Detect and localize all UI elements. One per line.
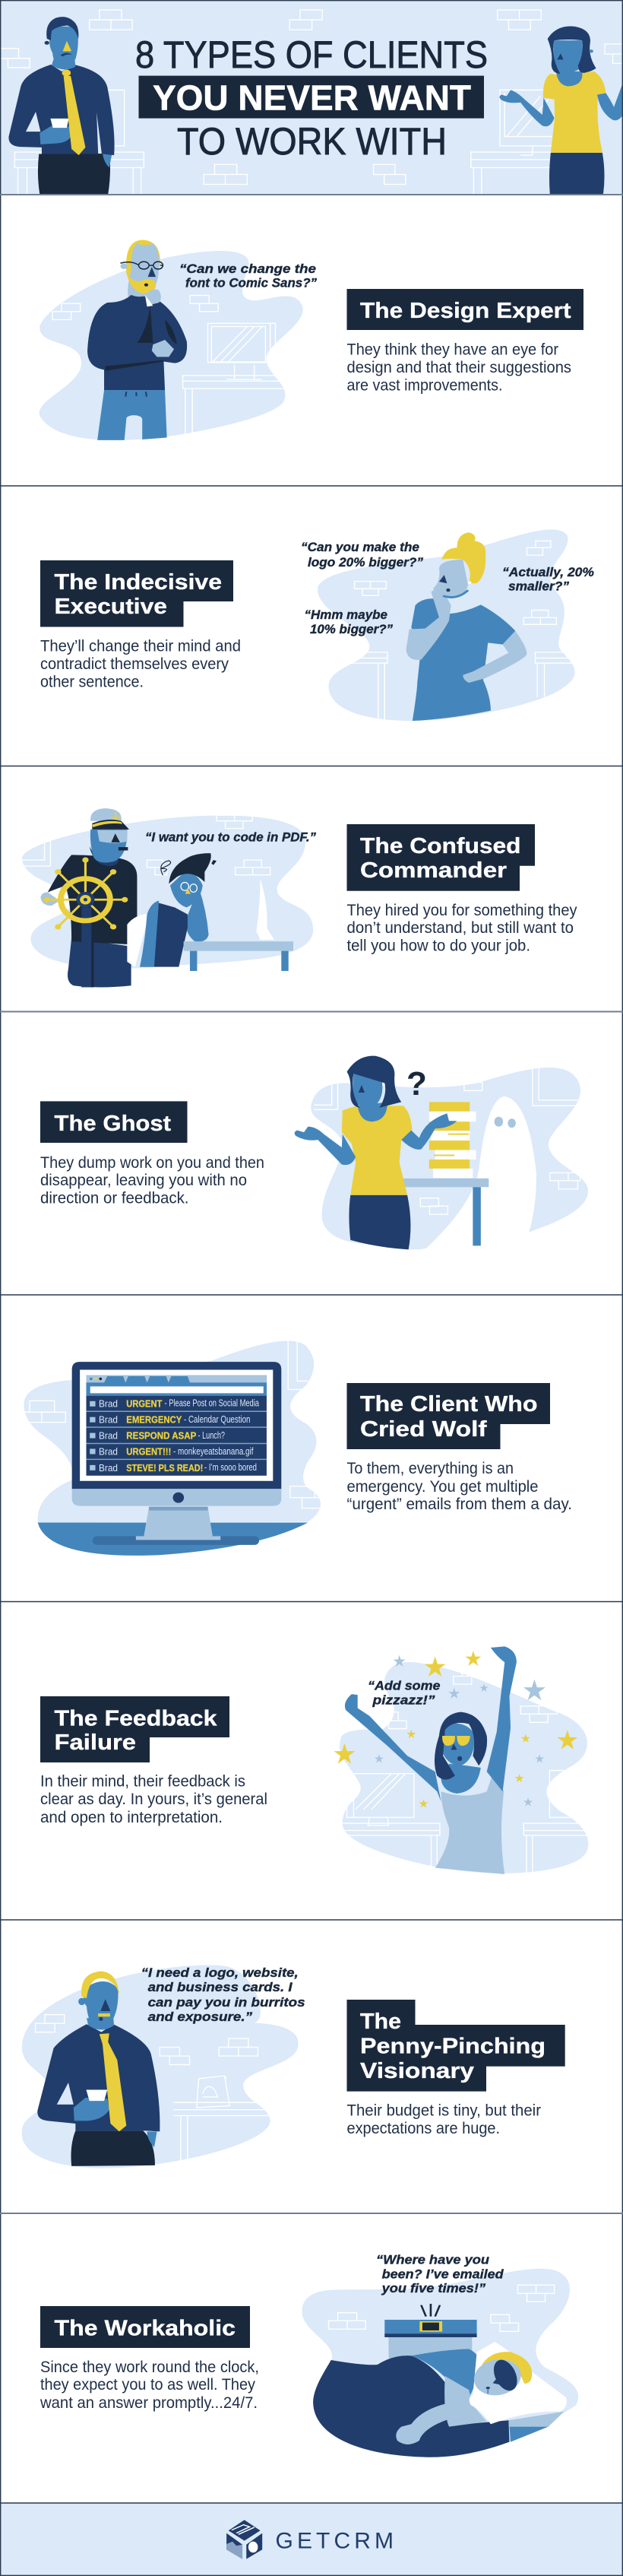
panel: the ghost	[40, 1056, 588, 1253]
header illustration	[0, 10, 623, 195]
description	[40, 637, 241, 690]
description: clear as day. In yours, it’s general	[40, 1791, 267, 1808]
quote: “Add some	[368, 1678, 441, 1692]
email list: STEVE! PLS READ!	[126, 1463, 203, 1474]
description	[346, 341, 571, 394]
description: are vast improvements.	[346, 377, 503, 394]
quotes: “Can you make the	[301, 540, 419, 554]
panel: the indecisive executive	[40, 529, 594, 721]
quote	[368, 1678, 441, 1708]
quotes: “Hmm maybe	[304, 608, 387, 622]
description: don’t understand, but still want to	[346, 919, 574, 937]
description: They hired you for something they	[346, 902, 577, 919]
email list: RESPOND ASAP	[126, 1431, 196, 1442]
description	[40, 2359, 259, 2412]
description: expectations are huge.	[346, 2120, 500, 2137]
quotes: smaller?”	[508, 579, 569, 594]
heading: The Design Expert	[360, 299, 571, 323]
heading: The Indecisive	[55, 570, 222, 595]
email list: Brad	[99, 1463, 118, 1474]
illustration: workaholic	[302, 2269, 578, 2457]
heading: Failure	[55, 1731, 136, 1755]
heading: Penny-Pinching	[360, 2034, 546, 2058]
quote: and exposure.”	[148, 2010, 253, 2024]
quote: pizzazz!”	[372, 1693, 435, 1708]
panel: the penny-pinching visionary	[22, 1965, 565, 2168]
panel: footer	[0, 2503, 623, 2576]
description: They’ll change their mind and	[40, 637, 241, 655]
description: contradict themselves every	[40, 655, 229, 673]
description	[40, 1773, 267, 1826]
heading	[40, 560, 233, 627]
quote: “Where have you	[376, 2253, 490, 2267]
quote: been? I’ve emailed	[382, 2267, 504, 2282]
quote: can pay you in burritos	[148, 1995, 305, 2010]
description: disappear, leaving you with no	[40, 1172, 247, 1189]
panel: the confused commander	[22, 808, 577, 987]
illustration: ghost	[295, 1056, 588, 1253]
quote	[179, 262, 317, 290]
heading: Cried Wolf	[360, 1417, 487, 1442]
email list: - monkeyeatsbanana.gif	[173, 1446, 254, 1457]
description: “urgent” emails from them a day.	[346, 1496, 572, 1513]
description: tell you how to do your job.	[346, 937, 530, 955]
quote: “Can we change the	[179, 262, 316, 276]
question mark: ?	[406, 1065, 427, 1102]
heading: The Feedback	[55, 1706, 217, 1731]
quotes	[301, 540, 594, 636]
heading: The Confused	[360, 834, 521, 858]
description	[346, 1460, 572, 1513]
quote	[141, 1965, 305, 2024]
heading	[346, 824, 535, 891]
description: Since they work round the clock,	[40, 2359, 259, 2376]
email list: Brad	[99, 1447, 118, 1458]
heading: Visionary	[360, 2059, 474, 2083]
email list: - Please Post on Social Media	[164, 1397, 259, 1408]
quote	[376, 2253, 504, 2295]
panel: the design expert	[40, 240, 583, 440]
illustration: penny-pinching visionary	[22, 1965, 298, 2168]
email list: URGENT!!!	[126, 1447, 171, 1458]
heading	[40, 1696, 229, 1762]
heading: The Workaholic	[55, 2317, 236, 2341]
icon: getcrm cube logo	[226, 2520, 262, 2559]
illustration: feedback failure	[334, 1646, 588, 1874]
description	[346, 2102, 541, 2137]
description: want an answer promptly...24/7.	[40, 2394, 258, 2412]
title: YOU NEVER WANT	[153, 78, 471, 117]
quote: “I need a logo, website,	[141, 1965, 299, 1980]
quote: “I want you to code in PDF.”	[145, 830, 316, 844]
description: direction or feedback.	[40, 1190, 188, 1207]
panel: the client who cried wolf	[24, 1340, 572, 1556]
description	[40, 1154, 264, 1207]
email list: URGENT	[126, 1398, 163, 1409]
heading: The Ghost	[55, 1112, 171, 1136]
email list: Brad	[99, 1431, 118, 1442]
title: 8 TYPES OF CLIENTS	[135, 33, 488, 76]
title	[135, 33, 488, 163]
heading	[346, 2000, 565, 2092]
description: Their budget is tiny, but their	[346, 2102, 541, 2120]
heading	[346, 289, 583, 330]
quote: font to Comic Sans?”	[185, 275, 317, 290]
heading: Commander	[360, 858, 507, 883]
panel: the feedback failure	[40, 1646, 588, 1874]
heading: The	[360, 2010, 401, 2034]
panel: the workaholic	[40, 2253, 578, 2457]
illustration: design expert	[40, 240, 303, 440]
email list	[99, 1397, 259, 1474]
heading	[40, 2306, 250, 2348]
illustration: indecisive executive	[318, 529, 575, 721]
logo wordmark: GETCRM	[275, 2529, 394, 2554]
email list: Brad	[99, 1398, 118, 1409]
description: and open to interpretation.	[40, 1809, 223, 1826]
panel: header	[0, 0, 623, 195]
quotes: logo 20% bigger?”	[308, 555, 423, 569]
quote: and business cards. I	[148, 1980, 293, 1994]
description: They dump work on you and then	[40, 1154, 264, 1172]
quote: you five times!”	[381, 2281, 486, 2295]
heading: The Client Who	[360, 1392, 538, 1416]
description: design and that their suggestions	[346, 359, 571, 376]
quotes: 10% bigger?”	[310, 622, 393, 636]
description: To them, everything is an	[346, 1460, 514, 1477]
description: other sentence.	[40, 673, 144, 690]
email list: - I’m sooo bored	[204, 1462, 257, 1473]
description: they expect you to as well. They	[40, 2376, 255, 2394]
heading	[40, 1101, 187, 1143]
description: They think they have an eye for	[346, 341, 558, 359]
email list: - Calendar Question	[184, 1414, 251, 1425]
description	[346, 902, 577, 955]
illustration: confused commander	[22, 808, 313, 987]
email list: Brad	[99, 1414, 118, 1425]
email list: EMERGENCY	[126, 1414, 182, 1425]
description: In their mind, their feedback is	[40, 1773, 245, 1790]
heading: Executive	[55, 595, 167, 619]
description: emergency. You get multiple	[346, 1478, 538, 1496]
email list: - Lunch?	[198, 1430, 225, 1441]
title: TO WORK WITH	[177, 120, 447, 163]
quotes: “Actually, 20%	[502, 565, 594, 579]
illustration: monitor with emails	[24, 1340, 322, 1556]
heading	[346, 1383, 550, 1449]
